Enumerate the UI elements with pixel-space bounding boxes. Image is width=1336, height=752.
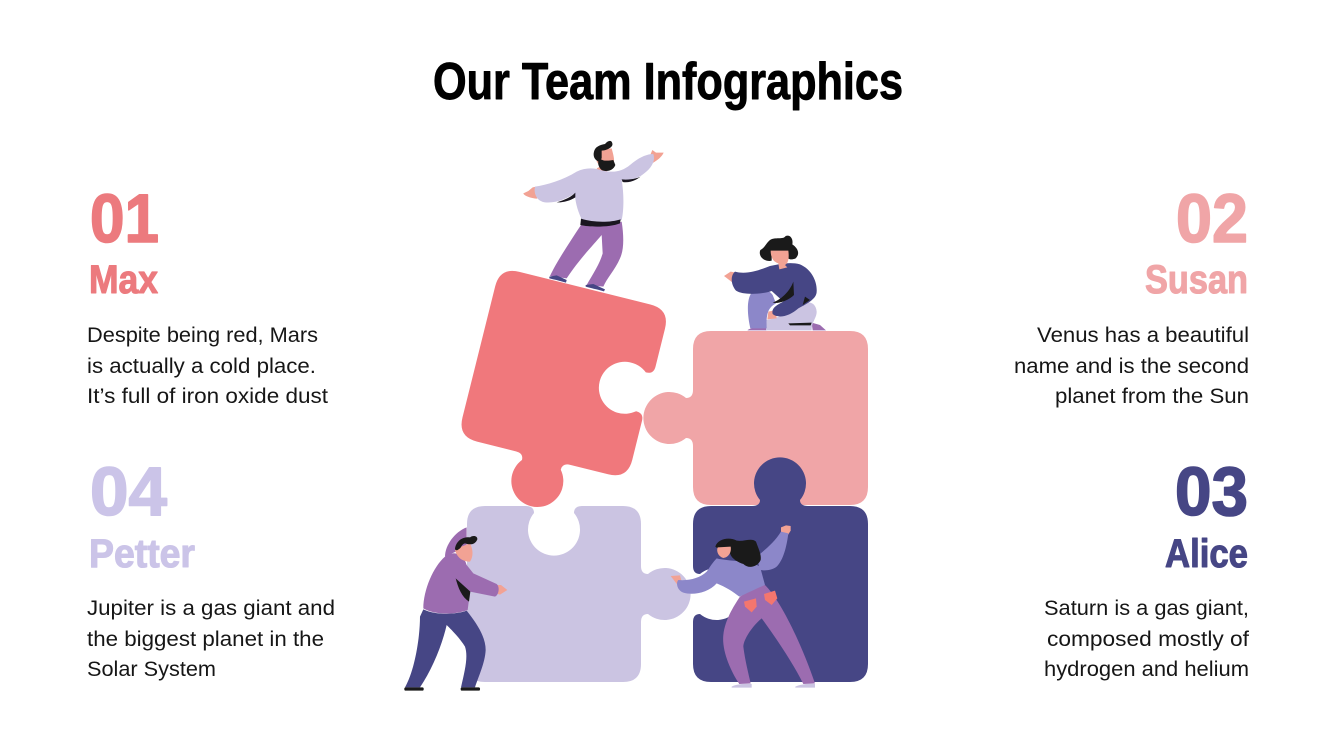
name Susan: Susan — [1145, 258, 1248, 302]
panel: 02 Susan — [1014, 180, 1249, 408]
figure: Petter pushing — [404, 527, 507, 691]
name Alice: Alice — [1165, 532, 1248, 576]
description Susan — [1014, 324, 1249, 408]
panel: 01 Max — [87, 180, 328, 408]
illustration: puzzle and team — [404, 141, 868, 691]
puzzle piece: navy — [693, 457, 868, 682]
panel: 03 Alice — [1044, 453, 1249, 681]
puzzle piece: lilac — [467, 506, 691, 682]
description Max: Despite being red, Mars — [87, 324, 318, 347]
description Max: is actually a cold place. — [87, 355, 316, 378]
description Susan: name and is the second — [1014, 355, 1249, 378]
description Max — [87, 324, 328, 408]
puzzle piece: red — [446, 267, 670, 527]
description Alice: hydrogen and helium — [1044, 658, 1249, 681]
name Max: Max — [89, 258, 158, 302]
number 01: 01 — [90, 180, 159, 257]
panel: 04 Petter — [87, 453, 335, 681]
description Alice: composed mostly of — [1047, 628, 1249, 651]
number 04: 04 — [90, 453, 167, 530]
description Petter: Solar System — [87, 658, 216, 681]
description Alice — [1044, 597, 1249, 681]
number 03: 03 — [1175, 453, 1248, 530]
description Susan: Venus has a beautiful — [1037, 324, 1249, 347]
description Alice: Saturn is a gas giant, — [1044, 597, 1249, 620]
description Susan: planet from the Sun — [1055, 385, 1249, 408]
number 02: 02 — [1176, 180, 1248, 257]
puzzle piece: pink — [643, 331, 868, 505]
figure: Max standing on top — [523, 141, 664, 291]
name Petter: Petter — [89, 532, 195, 576]
description Petter: Jupiter is a gas giant and — [87, 597, 335, 620]
description Petter: the biggest planet in the — [87, 628, 324, 651]
description Petter — [87, 597, 335, 681]
title: Our Team Infographics — [433, 53, 903, 111]
figure: Susan sitting — [724, 236, 826, 330]
description Max: It’s full of iron oxide dust — [87, 385, 328, 408]
figure: Alice pushing — [671, 525, 815, 688]
